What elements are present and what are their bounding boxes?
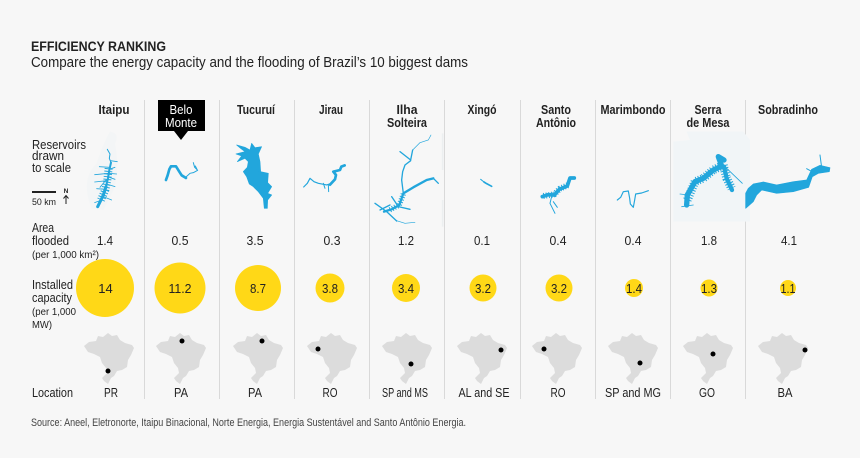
- area flooded values: 0.4: [550, 233, 566, 248]
- area flooded values: 0.5: [172, 233, 188, 248]
- reservoir: Marimbondo: [617, 191, 648, 207]
- title: EFFICIENCY RANKING: [31, 39, 166, 54]
- capacity bubble: Santo Antônio 3.2: [546, 274, 572, 302]
- dam name: Jirau: Jirau: [319, 102, 343, 117]
- location map: Santo Antônio: [532, 333, 582, 384]
- location map: Belo Monte: [156, 333, 206, 384]
- dam name: Belo Monte highlighted label: [158, 100, 205, 140]
- location map: Ilha Solteira: [382, 333, 432, 384]
- subtitle: Compare the energy capacity and the flooding of Brazil’s 10 biggest dams: [31, 55, 468, 71]
- scale bar 50 km with north arrow: [32, 188, 69, 208]
- row label: reservoirs drawn to scale: drawn: [32, 148, 64, 163]
- location map: Sobradinho: [758, 333, 808, 384]
- capacity bubble: Tucuruí 8.7: 8.7: [250, 281, 266, 296]
- area flooded values: 3.5: [246, 233, 264, 248]
- row label: reservoirs drawn to scale: [32, 137, 86, 175]
- location map: Serra de Mesa: [683, 333, 733, 384]
- location state codes: [104, 385, 793, 400]
- capacity bubble: Xingó 3.2: [470, 274, 496, 302]
- location state codes: SP and MS: [382, 385, 428, 400]
- dam name: Xingó: Xingó: [468, 102, 497, 117]
- dam name: Serra de Mesa: de Mesa: [686, 115, 730, 130]
- dam name: Ilha Solteira: [387, 102, 428, 130]
- capacity bubble: Ilha Solteira 3.4: 3.4: [398, 281, 414, 296]
- area flooded values: 0.3: [324, 233, 340, 248]
- capacity bubble: Belo Monte 11.2: 11.2: [168, 281, 192, 296]
- location map: Itaipu: [84, 333, 134, 384]
- row label: installed capacity: Installed: [32, 277, 73, 292]
- capacity bubble: Jirau 3.8: [316, 274, 344, 302]
- reservoir: Ilha Solteira: [375, 133, 443, 227]
- dam name: Serra de Mesa: Serra: [694, 102, 722, 117]
- location state codes: BA: [778, 385, 793, 400]
- capacity bubble: Itaipu 14: [76, 259, 134, 317]
- dam name: Itaipu: Itaipu: [98, 102, 130, 117]
- scale bar 50 km with north arrow: N: [64, 188, 69, 195]
- location map: Jirau: [307, 333, 357, 384]
- reservoir: Sobradinho: [746, 155, 830, 208]
- dam name: Sobradinho: Sobradinho: [758, 102, 818, 117]
- area flooded values: 0.4: [624, 233, 642, 248]
- dam name: Santo Antônio: [536, 102, 576, 130]
- row label: location: Location: [32, 385, 73, 400]
- capacity bubble: Belo Monte 11.2: [154, 262, 206, 314]
- capacity bubble: Sobradinho 1.1: 1.1: [780, 281, 796, 296]
- reservoir: Itaipu: [87, 132, 117, 210]
- capacity bubble: Santo Antônio 3.2: 3.2: [551, 281, 567, 296]
- row label: installed capacity: (per 1,000: [32, 307, 76, 318]
- capacity bubble: Xingó 3.2: 3.2: [475, 281, 491, 296]
- dam name: Belo Monte highlighted label: Belo: [170, 102, 192, 117]
- capacity bubble: Serra de Mesa 1.3: 1.3: [701, 281, 717, 296]
- row label: area flooded: (per 1,000 km²): [32, 250, 99, 261]
- reservoir: Xingó: [481, 179, 492, 186]
- reservoir: Tucuruí: [236, 143, 272, 208]
- location state codes: PR: [104, 385, 118, 400]
- location state codes: PA: [248, 385, 262, 400]
- location state codes: RO: [322, 385, 338, 400]
- dam name: Belo Monte highlighted label: Monte: [165, 115, 197, 130]
- location map: Marimbondo: [608, 333, 658, 384]
- row label: installed capacity: [32, 277, 76, 331]
- area flooded values: [97, 233, 797, 248]
- capacity bubble: Itaipu 14: 14: [98, 281, 113, 296]
- area flooded values: 0.1: [474, 233, 490, 248]
- row label: area flooded: flooded: [32, 233, 69, 248]
- row label: area flooded: Area: [32, 220, 55, 235]
- row label: reservoirs drawn to scale: to scale: [32, 160, 71, 175]
- row label: reservoirs drawn to scale: Reservoirs: [32, 137, 86, 152]
- dam name: Santo Antônio: Antônio: [536, 115, 576, 130]
- dam name: Ilha Solteira: Solteira: [387, 115, 428, 130]
- location map: Xingó: [457, 333, 507, 384]
- capacity bubble: Tucuruí 8.7: [235, 265, 281, 311]
- row label: area flooded: [32, 220, 99, 261]
- capacity bubble: Marimbondo 1.4: 1.4: [626, 281, 642, 296]
- dam name: Tucuruí: Tucuruí: [237, 102, 275, 117]
- dam name: Ilha Solteira: Ilha: [396, 102, 418, 117]
- dam name: Serra de Mesa: [686, 102, 730, 130]
- reservoir: Serra de Mesa: [673, 132, 750, 222]
- row label: installed capacity: capacity: [32, 290, 72, 305]
- location state codes: SP and MG: [605, 385, 661, 400]
- dam name: Santo Antônio: Santo: [541, 102, 571, 117]
- reservoir: Belo Monte: [166, 163, 198, 180]
- area flooded values: 1.8: [701, 233, 717, 248]
- dam name: Marimbondo: Marimbondo: [600, 102, 666, 117]
- reservoir: Santo Antônio: [542, 178, 574, 213]
- location map: Tucuruí: [233, 333, 283, 384]
- source note: Source: Aneel, Eletronorte, Itaipu Binacional, Norte Energia, Energia Sustentável and Santo Antônio Energia.: [31, 417, 466, 429]
- area flooded values: 1.4: [97, 233, 113, 248]
- capacity bubble: Jirau 3.8: 3.8: [322, 281, 338, 296]
- area flooded values: 1.2: [398, 233, 414, 248]
- location state codes: RO: [550, 385, 566, 400]
- area flooded values: 4.1: [781, 233, 797, 248]
- capacity bubble: Ilha Solteira 3.4: [392, 274, 420, 302]
- location state codes: GO: [699, 385, 715, 400]
- reservoir: Jirau: [304, 165, 345, 192]
- location state codes: AL and SE: [458, 385, 510, 400]
- row label: installed capacity: MW): [32, 320, 52, 331]
- scale bar 50 km with north arrow: 50 km: [32, 197, 56, 208]
- location state codes: PA: [174, 385, 188, 400]
